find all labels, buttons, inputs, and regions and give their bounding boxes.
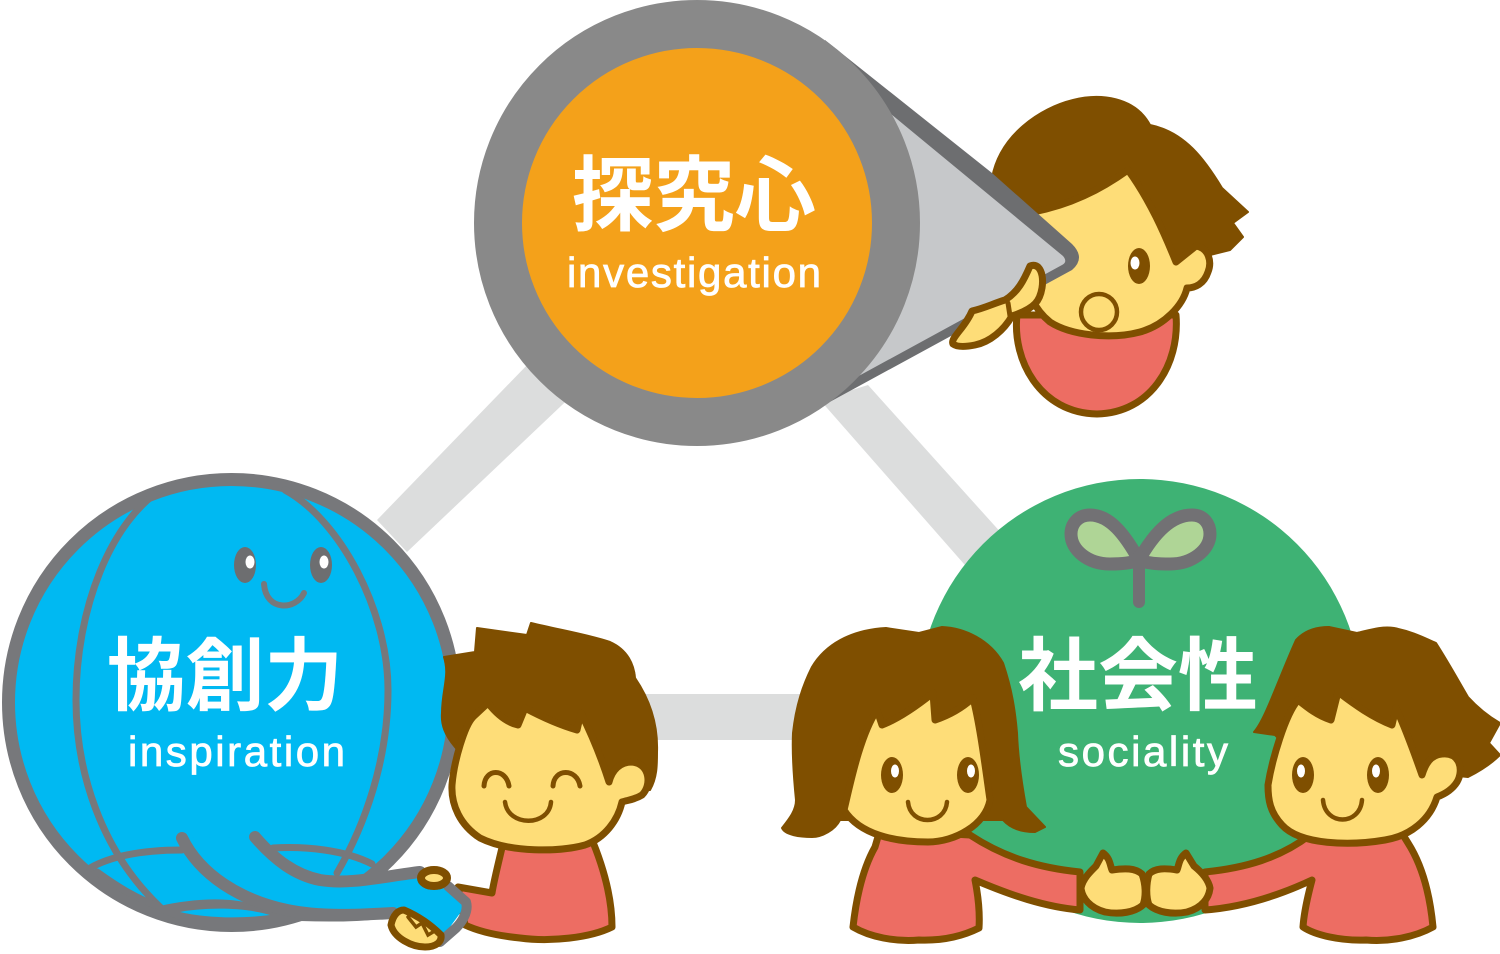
person: boy holding globe (442, 623, 657, 940)
person: girl (782, 627, 1080, 940)
circle: sociality (918, 479, 1362, 923)
joined hands (1081, 853, 1210, 913)
globe arms (182, 837, 467, 942)
heading: investigation ja: 探究心 (572, 151, 816, 242)
happy eyes (484, 772, 580, 786)
label: sociality: sociality (1058, 728, 1228, 775)
hand on magnifier (953, 265, 1042, 346)
person: boy with sprout (1205, 627, 1500, 940)
globe face (234, 547, 332, 605)
label: investigation: investigation (567, 249, 821, 296)
heading: inspiration ja: 協創力 (107, 632, 343, 721)
magnifier lens cone (815, 40, 1079, 410)
eyes (881, 757, 979, 793)
smile (908, 802, 947, 820)
icon: sprout (1071, 515, 1210, 602)
connector triangle (377, 331, 1030, 740)
globe hands (391, 870, 447, 947)
eyes (1292, 757, 1389, 793)
circle: inspiration globe (8, 480, 454, 930)
label: inspiration: inspiration (128, 728, 345, 775)
eye (1128, 248, 1150, 284)
heading: sociality ja: 社会性 (1018, 632, 1258, 721)
circle: investigation (498, 24, 896, 422)
smile (1323, 800, 1362, 820)
person: boy peering through magnifier (992, 97, 1248, 414)
mouth (1081, 294, 1117, 330)
globe lines (76, 487, 393, 930)
smile (505, 802, 551, 821)
